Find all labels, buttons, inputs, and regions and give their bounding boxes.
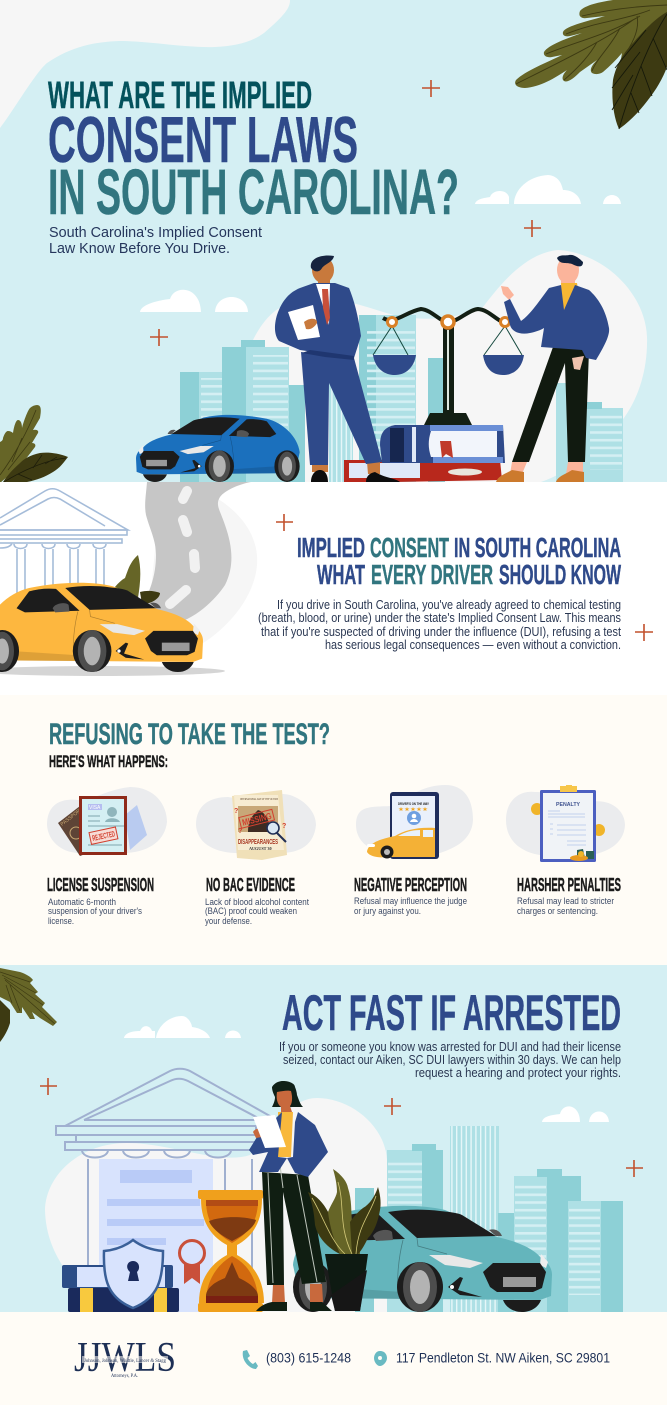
item text: [205, 897, 309, 926]
decorative plus marks: [40, 1078, 643, 1177]
heading: [297, 532, 621, 590]
illustration: stacked books: [62, 1265, 179, 1312]
icon: penalty clipboard: PENALTY: [556, 802, 580, 808]
body text: [258, 598, 621, 652]
panel: footer: [0, 1312, 667, 1405]
item text: Lack of blood alcohol content: [205, 897, 309, 907]
illustration: top right leaves: [515, 0, 667, 129]
illustration: books: [344, 425, 505, 483]
title: [48, 75, 459, 228]
illustration: top left leaves: [0, 968, 57, 1042]
item text: Refusal may influence the judge: [354, 896, 467, 906]
heading: CONSENT: [370, 532, 449, 563]
illustration: ribbon seal: [180, 1240, 204, 1284]
body text: [279, 1040, 621, 1080]
title: WHAT ARE THE IMPLIED: [48, 75, 312, 117]
illustration: leaves bottom left: [0, 405, 68, 483]
decorative plus marks: [276, 514, 653, 641]
background blob: road: [150, 497, 257, 645]
icon: shield with keyhole: [104, 1240, 163, 1308]
icon: phone and taxi: ★★★★★: [398, 806, 428, 813]
item: license suspension: [47, 787, 167, 926]
icon: missing newspaper: AUGUST 30: [249, 846, 272, 851]
icon: phone: [243, 1350, 258, 1369]
illustration: courthouse: [56, 1069, 277, 1280]
icon: visa and passport: PASSPORT: [60, 806, 84, 828]
body text: that if you're suspected of driving under the influence (DUI), refusing a test: [261, 625, 621, 639]
icon: missing newspaper: ?: [238, 828, 242, 835]
logo: Johnson, Johnson, Whittle, Lancer & Stagg: [84, 1358, 166, 1364]
item text: or jury against you.: [354, 906, 421, 916]
background blob: top left: [0, 0, 290, 128]
illustration: road: [145, 482, 251, 625]
subtitle: Law Know Before You Drive.: [49, 241, 230, 257]
icon: missing newspaper: INTERNATIONAL DAY OF THE VICTIMS: [240, 797, 278, 801]
item text: suspension of your driver's: [48, 906, 142, 916]
item title: NEGATIVE PERCEPTION: [354, 875, 467, 895]
item: no BAC evidence: [196, 790, 316, 926]
heading: EVERY DRIVER: [371, 559, 493, 590]
body text: If you or someone you know was arrested for DUI and had their license: [279, 1040, 621, 1054]
icon: visa and passport: VISA: [89, 805, 101, 811]
body text: has serious legal consequences — even without a conviction.: [325, 638, 621, 652]
phone number: (803) 615-1248: [266, 1350, 351, 1366]
subheading: HERE'S WHAT HAPPENS:: [49, 752, 168, 771]
background blob: [45, 1098, 387, 1312]
heading: REFUSING TO TAKE THE TEST?: [49, 718, 330, 751]
item text: license.: [48, 916, 74, 926]
city skyline: [355, 1126, 623, 1312]
body text: request a hearing and protect your rights.: [415, 1066, 621, 1080]
heading: WHAT: [317, 559, 365, 590]
illustration: woman reading: [249, 1081, 332, 1311]
illustration: teal car: [293, 1206, 552, 1312]
car shadow: [0, 666, 225, 676]
illustration: yellow car: [0, 583, 203, 672]
item text: [354, 896, 467, 916]
panel: refusing the test: [0, 695, 667, 965]
subtitle: [49, 225, 262, 257]
address: 117 Pendleton St. NW Aiken, SC 29801: [396, 1350, 610, 1366]
icon: phone and taxi: DRIVER'S ON THE WAY: [398, 802, 429, 806]
item text: [48, 897, 142, 926]
item: negative perception: [354, 785, 473, 916]
decorative plus marks: [150, 80, 633, 362]
illustration: scales of justice: [373, 309, 524, 425]
icon: visa and passport: [47, 787, 167, 856]
item title: LICENSE SUSPENSION: [47, 875, 154, 895]
clouds: [140, 175, 621, 312]
subtitle: South Carolina's Implied Consent: [49, 225, 262, 241]
item text: charges or sentencing.: [517, 906, 598, 916]
illustration: man gesturing: [496, 255, 609, 482]
logo: Attorneys, P.A.: [111, 1373, 138, 1379]
body text: seized, contact our Aiken, SC DUI lawyers within 30 days. We can help: [283, 1053, 621, 1067]
logo: JJWLS: [74, 1335, 176, 1381]
heading: IMPLIED: [297, 532, 365, 563]
body text: (breath, blood, or urine) under the state's Implied Consent Law. This means: [258, 611, 621, 625]
item text: [517, 896, 614, 916]
item text: (BAC) proof could weaken: [205, 906, 297, 916]
illustration: plant behind car: [108, 555, 160, 604]
icon: location pin: [374, 1351, 387, 1366]
illustration: man with document: [275, 256, 400, 482]
illustration: potted plant: [308, 1169, 381, 1311]
city skyline: [180, 315, 623, 482]
illustration: blue car: [136, 415, 300, 482]
illustration: hourglass: [198, 1190, 264, 1312]
item title: NO BAC EVIDENCE: [206, 875, 295, 895]
icon: missing newspaper: [196, 790, 316, 860]
body text: If you drive in South Carolina, you've already agreed to chemical testing: [277, 598, 621, 612]
icon: missing newspaper: DISAPPEARANCES: [238, 837, 278, 846]
icon: missing newspaper: ?: [282, 823, 286, 830]
illustration: courthouse: [0, 489, 128, 610]
icon: missing newspaper: MISSING: [241, 811, 273, 828]
icon: missing newspaper: ?: [234, 808, 238, 815]
illustration: document: [99, 1159, 213, 1312]
panel: act fast if arrested: [0, 965, 667, 1312]
item: harsher penalties: [506, 785, 625, 916]
icon: phone and taxi: [356, 785, 473, 859]
panel: implied consent intro: [0, 482, 667, 695]
title: CONSENT LAWS: [48, 103, 358, 176]
item text: Refusal may lead to stricter: [517, 896, 614, 906]
icon: visa and passport: REJECTED: [91, 829, 116, 843]
clouds: [124, 1016, 609, 1122]
item text: Automatic 6-month: [48, 897, 116, 907]
item text: your defense.: [205, 916, 252, 926]
background blob: behind figures: [253, 250, 647, 482]
panel: hero: [0, 0, 667, 483]
